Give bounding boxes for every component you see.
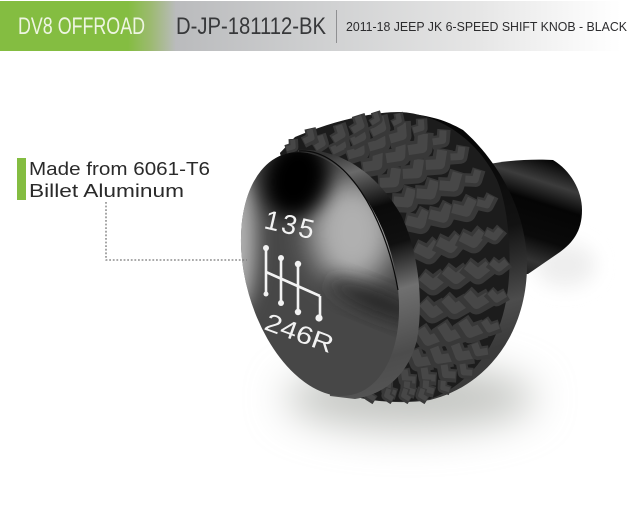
callout text: Billet Aluminum: [29, 181, 184, 201]
shift knob product photo: [214, 112, 582, 415]
shift pattern icon: [263, 245, 323, 322]
ground shadow: [285, 243, 595, 430]
rear collar: [280, 113, 527, 402]
product description: 2011-18 JEEP JK 6-SPEED SHIFT KNOB - BLACK: [346, 19, 627, 34]
part number: D-JP-181112-BK: [176, 13, 326, 40]
callout text: Made from 6061-T6: [29, 159, 210, 179]
tire tread: [280, 112, 510, 402]
front collar band: [298, 150, 420, 399]
callout accent bar: [17, 158, 26, 200]
header band: [0, 1, 640, 51]
callout leader line: [106, 202, 247, 260]
gear numbers top row: 135: [262, 205, 317, 245]
knob stem: [490, 160, 582, 274]
knob face: [240, 150, 399, 396]
brand name: DV8 OFFROAD: [18, 13, 145, 40]
gear numbers bottom row: 246R: [261, 308, 337, 359]
callout: material: [17, 158, 247, 260]
